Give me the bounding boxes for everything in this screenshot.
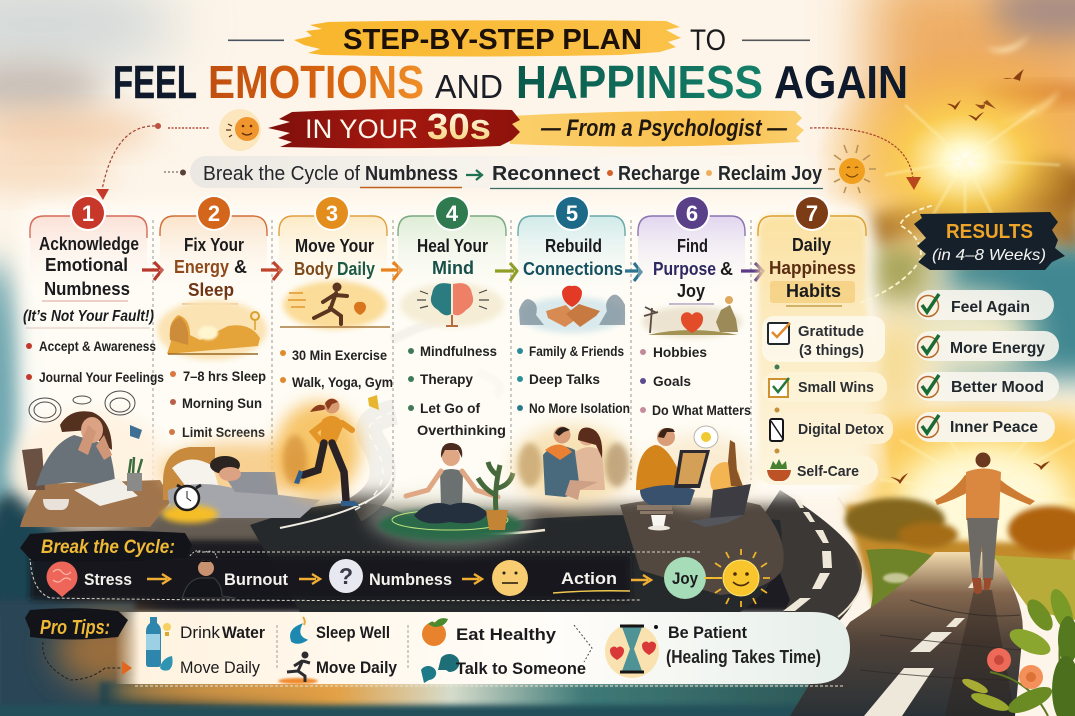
icon: brain bbox=[400, 283, 504, 327]
number badge bbox=[314, 195, 350, 231]
number badge: 4 bbox=[446, 201, 459, 226]
bullets: No More Isolation bbox=[529, 400, 630, 416]
panel: step 1 acknowledge bbox=[23, 195, 164, 385]
birds bbox=[890, 69, 1050, 484]
sun rays bbox=[880, 105, 1075, 500]
tip: be patient: Be Patient bbox=[668, 623, 747, 642]
title brush bbox=[294, 20, 681, 56]
bullets bbox=[517, 343, 630, 416]
tip: drink water and move daily: Water bbox=[222, 623, 265, 642]
subtitle banner: — From a Psychologist — bbox=[540, 115, 788, 142]
illustration: man with laptop bbox=[636, 426, 755, 530]
number badge bbox=[196, 195, 232, 231]
yellow brush: from a psychologist bbox=[510, 111, 804, 147]
stress bbox=[46, 562, 132, 597]
panel: results: (in 4–8 Weeks) bbox=[932, 247, 1046, 264]
bullets: Morning Sun bbox=[182, 395, 262, 411]
heading: Body bbox=[294, 259, 333, 279]
tip: drink water and move daily bbox=[146, 617, 265, 677]
heading: Purpose bbox=[653, 259, 716, 279]
number badge bbox=[434, 195, 470, 231]
result: better mood: Better Mood bbox=[951, 379, 1044, 396]
tagline bbox=[164, 156, 850, 188]
numbness: ? bbox=[339, 563, 353, 589]
action: Action bbox=[561, 569, 617, 588]
bullets bbox=[280, 347, 393, 390]
bullets bbox=[408, 343, 506, 438]
action bbox=[553, 569, 630, 593]
habit: gratitude bbox=[762, 316, 885, 362]
break the cycle label bbox=[20, 531, 192, 562]
stress: Stress bbox=[84, 570, 132, 589]
heading bbox=[769, 235, 856, 303]
icon: smiling face bbox=[219, 109, 261, 151]
panel: step 3 move your body bbox=[279, 195, 393, 390]
panel: results: RESULTS bbox=[946, 221, 1033, 243]
heading: Numbness bbox=[44, 279, 130, 299]
icon: joyful sun bbox=[712, 549, 770, 607]
title: STEP-BY-STEP PLAN bbox=[343, 24, 642, 56]
illustration: man sleeping bbox=[160, 442, 320, 523]
result: more energy bbox=[915, 331, 1059, 361]
title: AGAIN bbox=[774, 56, 908, 108]
heading bbox=[294, 236, 375, 279]
illustration: man walking towards the sun bbox=[935, 452, 1035, 594]
title: FEEL bbox=[113, 56, 197, 108]
break the cycle strip bbox=[20, 531, 770, 607]
tip: be patient bbox=[605, 623, 821, 678]
white glow behind the steps bbox=[22, 205, 872, 495]
heading: Energy bbox=[174, 257, 229, 277]
subtitle banner: 30s bbox=[427, 106, 491, 147]
title: HAPPINESS bbox=[516, 56, 763, 108]
subtitle banner bbox=[268, 106, 804, 148]
number badge: 1 bbox=[82, 201, 94, 226]
habit: gratitude: Gratitude bbox=[798, 323, 864, 340]
heading: (It’s Not Your Fault!) bbox=[23, 308, 154, 325]
bullets bbox=[26, 338, 164, 385]
illustration: flowers and leaves bbox=[960, 586, 1075, 716]
bullets: Family & Friends bbox=[529, 343, 624, 359]
panel: step 7 daily habits bbox=[758, 195, 893, 485]
heading: Connections bbox=[523, 259, 623, 279]
heading: Mind bbox=[432, 258, 474, 278]
red brush: in your 30s bbox=[268, 109, 520, 148]
burnout: Burnout bbox=[224, 570, 288, 589]
bullets: Limit Screens bbox=[182, 424, 265, 440]
heading: Emotional bbox=[45, 255, 128, 275]
bullets: 7–8 hrs Sleep bbox=[183, 368, 266, 384]
dashed trail to results bbox=[860, 205, 935, 303]
habit: self-care: Self-Care bbox=[797, 463, 859, 480]
heading bbox=[653, 236, 733, 301]
heading: Heal Your bbox=[417, 236, 488, 256]
result: feel again bbox=[915, 290, 1054, 320]
tagline: Break the Cycle of bbox=[203, 163, 360, 185]
illustration: woman meditating bbox=[366, 443, 534, 548]
results brush bbox=[914, 212, 1065, 270]
pro tips label: Pro Tips: bbox=[40, 617, 110, 639]
bullets: Deep Talks bbox=[529, 371, 600, 387]
number badge bbox=[674, 195, 710, 231]
heading: Fix Your bbox=[184, 235, 244, 255]
number badge: 3 bbox=[326, 201, 338, 226]
illustration: overwhelmed woman at desk bbox=[10, 391, 172, 530]
heading: Daily bbox=[792, 235, 831, 255]
number badge bbox=[70, 195, 106, 231]
pro tips panel bbox=[25, 608, 850, 686]
scenery: grass, trees and walking path bbox=[790, 498, 1075, 716]
habit: digital detox bbox=[762, 414, 893, 444]
heading bbox=[523, 236, 623, 279]
heading: Rebuild bbox=[545, 236, 602, 256]
numbness bbox=[329, 559, 452, 593]
tip: sleep well and move daily: Move Daily bbox=[316, 658, 397, 677]
pro tips label bbox=[25, 608, 128, 640]
bullets: 30 Min Exercise bbox=[292, 347, 387, 363]
tip: eat healthy and talk to someone bbox=[421, 618, 592, 683]
habit: digital detox: Digital Detox bbox=[798, 421, 885, 438]
result: inner peace: Inner Peace bbox=[950, 419, 1038, 436]
bullets: Overthinking bbox=[417, 422, 506, 438]
title: TO bbox=[690, 24, 726, 57]
joy bbox=[664, 557, 722, 599]
number badge: 6 bbox=[686, 201, 698, 226]
tagline: Recharge bbox=[618, 163, 700, 185]
heading: Habits bbox=[786, 281, 841, 301]
heading: Happiness bbox=[769, 258, 856, 278]
panel: step 2 energy and sleep bbox=[157, 195, 267, 440]
bullets: Therapy bbox=[420, 371, 473, 387]
heading: Acknowledge bbox=[39, 234, 139, 254]
bullets: Let Go of bbox=[420, 400, 480, 416]
bullets bbox=[169, 368, 266, 440]
bullets: Mindfulness bbox=[420, 343, 497, 359]
numbness: Numbness bbox=[369, 570, 452, 589]
tip: eat healthy and talk to someone: Eat Healthy bbox=[456, 625, 557, 644]
result: more energy: More Energy bbox=[950, 340, 1045, 357]
bullets: Journal Your Feelings bbox=[39, 369, 164, 385]
icon: sleep illustration bbox=[157, 300, 267, 360]
heading: Joy bbox=[677, 281, 705, 301]
winding road bbox=[30, 322, 866, 640]
title: AND bbox=[435, 68, 503, 105]
number badge bbox=[794, 195, 830, 231]
panel: step 4 heal your mind bbox=[398, 195, 506, 438]
number badge: 5 bbox=[566, 201, 578, 226]
heading bbox=[417, 236, 488, 278]
tagline: Reclaim Joy bbox=[718, 163, 823, 185]
heading bbox=[23, 234, 154, 325]
arrow: dashed curve to tips bbox=[43, 642, 132, 680]
icon: heart and gardener bbox=[642, 296, 742, 338]
bullets: Goals bbox=[653, 373, 691, 389]
tagline: Reconnect bbox=[492, 162, 600, 185]
number badge: 2 bbox=[208, 201, 220, 226]
tip: eat healthy and talk to someone: Talk to Someone bbox=[456, 659, 586, 678]
arrow: dotted path to results bbox=[810, 128, 921, 190]
title bbox=[113, 20, 908, 108]
bullets: Hobbies bbox=[653, 344, 707, 360]
result: feel again: Feel Again bbox=[951, 299, 1030, 316]
heading: Sleep bbox=[188, 280, 234, 300]
illustration: couple sitting bbox=[512, 425, 632, 505]
bullets: Walk, Yoga, Gym bbox=[292, 374, 393, 390]
bullets bbox=[640, 344, 751, 418]
arrow: 1 to 2 bbox=[142, 262, 162, 280]
burnout bbox=[182, 551, 288, 600]
arrow: dotted path to step 1 bbox=[96, 123, 210, 200]
column dividers bbox=[153, 220, 751, 520]
heading: Daily bbox=[337, 259, 375, 279]
neutral face bbox=[492, 560, 528, 596]
icon: handshake and heart bbox=[519, 286, 625, 333]
habit: small wins bbox=[762, 372, 887, 402]
icon: runner and sun bbox=[280, 281, 390, 329]
arrow: 5 to 6 bbox=[625, 263, 641, 281]
heading bbox=[174, 235, 247, 300]
habit: gratitude: (3 things) bbox=[799, 342, 864, 359]
tip: sleep well and move daily: Sleep Well bbox=[316, 623, 390, 642]
panel: step 6 find purpose bbox=[638, 195, 751, 418]
panel: results bbox=[914, 212, 1065, 442]
bullets: Do What Matters bbox=[652, 402, 751, 418]
title: EMOTIONS bbox=[208, 56, 424, 108]
tip: drink water and move daily: Move Daily bbox=[180, 658, 260, 677]
break the cycle label: Break the Cycle: bbox=[41, 537, 175, 558]
arrow: 6 to 7 bbox=[741, 263, 763, 281]
panel: step 5 rebuild connections bbox=[517, 195, 630, 416]
number badge bbox=[554, 195, 590, 231]
habit: self-care bbox=[760, 456, 878, 485]
icon: smiling sun bbox=[828, 145, 876, 193]
subtitle banner: IN YOUR bbox=[305, 114, 418, 144]
result: better mood bbox=[915, 372, 1059, 401]
illustration: woman running bbox=[276, 395, 379, 506]
heading: Move Your bbox=[295, 236, 374, 256]
habit: small wins: Small Wins bbox=[798, 379, 874, 396]
heading: Find bbox=[677, 236, 708, 256]
dark road band bbox=[0, 490, 880, 716]
heading: & bbox=[720, 259, 733, 279]
arrow: 3 to 4 bbox=[381, 262, 401, 280]
tip: be patient: (Healing Takes Time) bbox=[666, 647, 821, 667]
joy: Joy bbox=[672, 569, 698, 588]
heading: & bbox=[234, 257, 247, 277]
result: inner peace bbox=[915, 412, 1055, 442]
number badge: 7 bbox=[806, 201, 818, 226]
arrow: 2 to 3 bbox=[261, 262, 281, 280]
bullets: Accept & Awareness bbox=[39, 338, 156, 354]
tagline: Numbness bbox=[365, 163, 458, 185]
tip: drink water and move daily: Drink bbox=[180, 623, 221, 642]
tip: sleep well and move daily bbox=[278, 617, 397, 684]
arrow: 4 to 5 bbox=[495, 263, 517, 281]
